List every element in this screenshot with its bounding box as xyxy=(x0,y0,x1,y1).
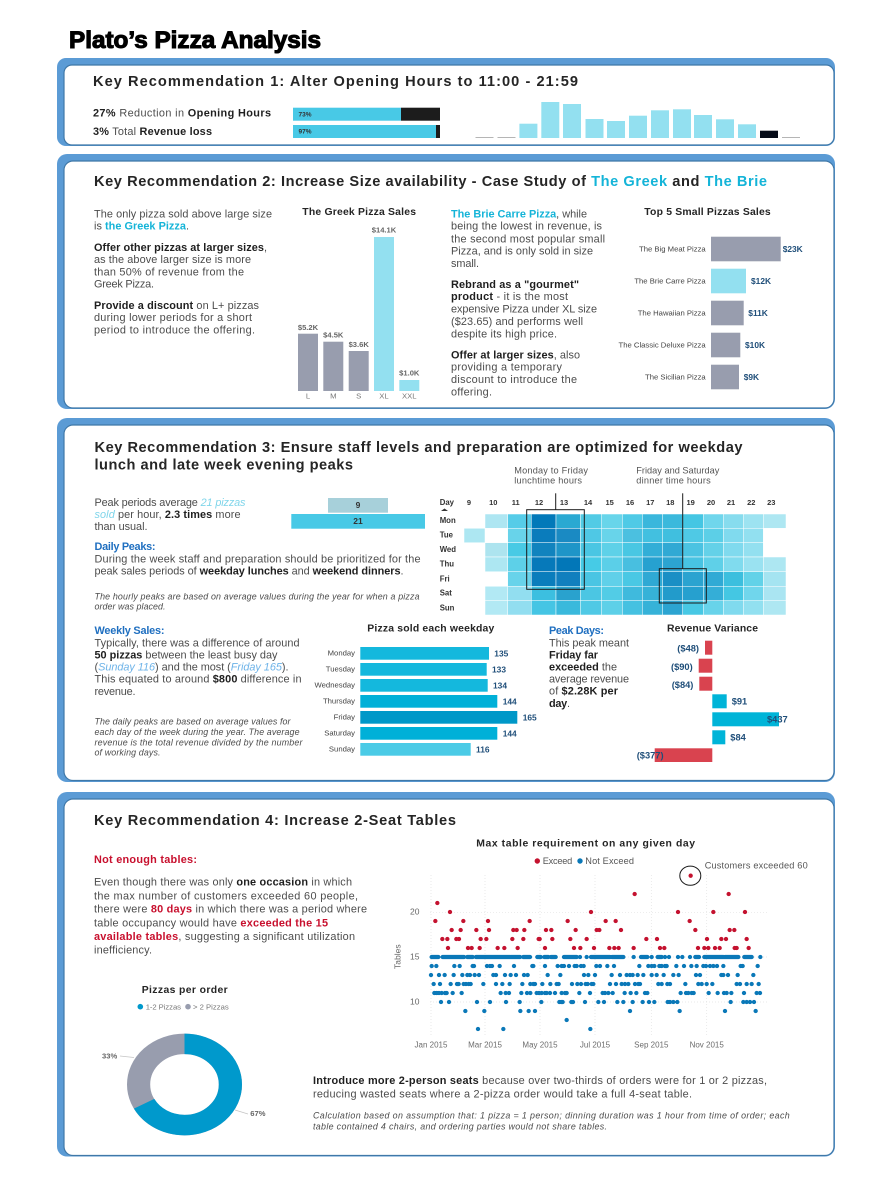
scatter chart: max table requirement: Sep 2015 xyxy=(634,1040,669,1049)
text block: brie carre pizza: being the lowest in revenue, is xyxy=(451,221,603,233)
scatter chart: max table requirement: Jul 2015 xyxy=(580,1040,611,1049)
text block: greek pizza: Provide a discount on L+ pizzas xyxy=(94,300,260,312)
bar chart: peak comparison: 21 xyxy=(353,516,363,526)
bar chart: top 5 small pizzas sales: The Big Meat Pizza xyxy=(639,245,706,254)
bar chart: the greek pizza sales: $5.2K xyxy=(298,323,319,332)
note: daily peaks xyxy=(94,717,304,758)
text block: greek pizza xyxy=(94,209,272,336)
heatmap: orders by day and hour: Tue xyxy=(440,531,454,540)
scatter chart: max table requirement xyxy=(392,839,767,1049)
text block: brie carre pizza: despite its high price. xyxy=(451,329,557,341)
bar chart: revenue variance: ($90) xyxy=(671,662,693,672)
text block: brie carre pizza: providing a temporary xyxy=(451,361,563,373)
text: opening hours reduction: 27% Reduction in Opening Hours xyxy=(93,108,271,120)
progress bar: revenue: 97% xyxy=(298,129,312,136)
bar chart: top 5 small pizzas sales xyxy=(619,207,803,389)
bar chart: revenue variance: $437 xyxy=(767,714,788,724)
bar chart: the greek pizza sales: The Greek Pizza Sales xyxy=(302,207,416,218)
text block: greek pizza: period to introduce the offering. xyxy=(94,324,255,336)
text: introduce more 2-person seats: Introduce more 2-person seats because over two-thirds of orders were for 1 or 2 pizzas, xyxy=(313,1075,767,1087)
text: weekly sales: 50 pizzas between the least busy day xyxy=(94,650,278,662)
heatmap: orders by day and hour: 9 xyxy=(467,498,471,507)
bar chart: top 5 small pizzas sales: $9K xyxy=(744,372,759,382)
bar chart: pizza sold each weekday: 133 xyxy=(492,664,506,674)
title: Plato’s Pizza Analysis xyxy=(69,27,321,54)
heatmap: orders by day and hour: Sat xyxy=(440,589,452,598)
heatmap: orders by day and hour: 16 xyxy=(626,498,634,507)
heatmap: orders by day and hour xyxy=(440,493,786,615)
heatmap: orders by day and hour: 13 xyxy=(560,498,568,507)
text block: greek pizza: Offer other pizzas at larger sizes, xyxy=(94,242,267,254)
donut chart: pizzas per order: 33% xyxy=(102,1051,117,1060)
text: not enough tables xyxy=(94,854,367,956)
heatmap: orders by day and hour: 19 xyxy=(687,498,695,507)
donut chart: pizzas per order: > 2 Pizzas xyxy=(193,1002,229,1012)
text: introduce more 2-person seats: reducing wasted seats where a 2-pizza order would take a full 4-seat table. xyxy=(313,1088,692,1100)
note: calculation assumptions: Calculation based on assumption that: 1 pizza = 1 person; dinning duration was 1 hour from time of order; each xyxy=(313,1111,790,1121)
heatmap: orders by day and hour: 20 xyxy=(707,498,715,507)
bar chart: pizza sold each weekday: 135 xyxy=(494,648,509,658)
text: peak days: of $2.28K per xyxy=(549,686,619,698)
heatmap: orders by day and hour: Mon xyxy=(440,516,456,525)
bar chart: the greek pizza sales: $4.5K xyxy=(323,330,344,339)
text: daily peaks: Daily Peaks: xyxy=(94,541,156,553)
bar chart: the greek pizza sales: XXL xyxy=(402,392,417,400)
note: hourly peaks: order was placed. xyxy=(94,602,166,612)
heading: recommendation 2: Key Recommendation 2: Increase Size availability - Case Study of The Greek and The Brie xyxy=(94,174,767,190)
note: hourly peaks: The hourly peaks are based on average values during the year for when a pizza xyxy=(94,591,420,601)
bar chart: top 5 small pizzas sales: The Hawaiian Pizza xyxy=(638,308,706,317)
text block: brie carre pizza xyxy=(451,209,605,398)
scatter chart: max table requirement: Not Exceed xyxy=(585,856,634,866)
text: peak periods: sold per hour, 2.3 times more xyxy=(94,509,240,521)
text: not enough tables: table occupancy would have exceeded the 15 xyxy=(94,917,328,929)
panel: recommendation 3 xyxy=(57,418,835,782)
heatmap: orders by day and hour: Wed xyxy=(440,545,456,554)
text: daily peaks xyxy=(94,541,420,577)
bar chart: top 5 small pizzas sales: Top 5 Small Pizzas Sales xyxy=(644,207,771,218)
text: revenue loss: 3% Total Revenue loss xyxy=(93,126,212,138)
bar chart: pizza sold each weekday: 165 xyxy=(523,712,537,722)
bar chart: the greek pizza sales: S xyxy=(356,392,361,400)
progress bar: revenue xyxy=(293,125,440,138)
text block: greek pizza: is the Greek Pizza. xyxy=(94,220,189,232)
text block: brie carre pizza: Rebrand as a "gourmet" xyxy=(451,279,579,291)
scatter chart: max table requirement: May 2015 xyxy=(522,1040,558,1049)
donut chart: pizzas per order: Pizzas per order xyxy=(142,985,228,996)
text: peak days: exceeded the xyxy=(549,662,617,674)
note: daily peaks: The daily peaks are based on average values for xyxy=(94,717,292,727)
note: daily peaks: each day of the week during the year. The average xyxy=(94,727,300,737)
bar chart: pizza sold each weekday: Monday xyxy=(328,649,355,658)
bar chart: the greek pizza sales: $14.1K xyxy=(372,226,397,235)
bar chart: top 5 small pizzas sales: The Classic Deluxe Pizza xyxy=(619,340,706,349)
bar chart: the greek pizza sales: M xyxy=(330,392,337,400)
annotation: lunchtime hours: Monday to Friday xyxy=(514,465,588,475)
text: peak days xyxy=(549,625,629,710)
text: not enough tables: Even though there was only one occasion in which xyxy=(94,877,352,889)
scatter chart: max table requirement: 10 xyxy=(410,996,420,1006)
bar chart: revenue variance: $84 xyxy=(730,733,747,743)
callout: customers exceeded 60: Customers exceeded 60 xyxy=(705,861,808,871)
text: not enough tables: the max number of customers exceeded 60 people, xyxy=(94,890,358,902)
text: not enough tables: Not enough tables: xyxy=(94,854,197,866)
bar chart: revenue variance: $91 xyxy=(732,697,747,707)
text: weekly sales: Typically, there was a difference of around xyxy=(94,638,300,650)
bar chart: pizza sold each weekday: 144 xyxy=(503,728,517,738)
text: peak days: Peak Days: xyxy=(549,625,604,637)
text block: greek pizza: as the above larger size is more xyxy=(94,254,251,266)
scatter chart: max table requirement: Exceed xyxy=(543,856,572,866)
bar chart: revenue variance xyxy=(637,624,788,762)
text: peak days: day. xyxy=(549,698,570,710)
note: daily peaks: of working days. xyxy=(94,748,160,758)
text: peak periods: than usual. xyxy=(94,521,148,533)
heatmap: orders by day and hour: 10 xyxy=(489,498,497,507)
heatmap: orders by day and hour: Thu xyxy=(440,560,454,569)
bar chart: top 5 small pizzas sales: The Brie Carre Pizza xyxy=(634,276,706,285)
heatmap: orders by day and hour: Fri xyxy=(440,574,450,583)
bar chart: peak comparison: 9 xyxy=(356,500,361,510)
bar chart: the greek pizza sales: $3.6K xyxy=(349,340,369,349)
text: peak periods xyxy=(94,497,246,533)
text: weekly sales: This equated to around $800 difference in xyxy=(94,674,302,686)
highlight box: dinner time xyxy=(659,493,706,603)
bar chart: top 5 small pizzas sales: $23K xyxy=(783,244,803,254)
text block: greek pizza: during lower periods for a short xyxy=(94,312,252,324)
text: daily peaks: peak sales periods of weekday lunches and weekend dinners. xyxy=(94,565,404,577)
annotation: dinner time hours xyxy=(636,465,720,485)
annotation: lunchtime hours xyxy=(514,465,588,485)
heatmap: orders by day and hour: Day xyxy=(440,498,455,507)
bar chart: peak comparison xyxy=(291,498,425,529)
heatmap: orders by day and hour: 12 xyxy=(535,498,543,507)
text block: brie carre pizza: discount to introduce the xyxy=(451,374,577,386)
bar chart: the greek pizza sales: L xyxy=(306,392,311,400)
text: peak days: Friday far xyxy=(549,650,599,662)
bar chart: pizza sold each weekday: Tuesday xyxy=(326,665,355,674)
bar chart: pizza sold each weekday: 134 xyxy=(493,680,507,690)
text block: brie carre pizza: The Brie Carre Pizza, while xyxy=(451,209,587,221)
text block: brie carre pizza: ($23.65) and performs well xyxy=(451,316,583,328)
bar chart: the greek pizza sales xyxy=(298,207,420,400)
heading: recommendation 3: lunch and late week evening peaks xyxy=(94,458,353,474)
text: weekly sales xyxy=(94,625,302,698)
text: peak days: average revenue xyxy=(549,674,629,686)
annotation: lunchtime hours: lunchtime hours xyxy=(514,475,582,485)
heatmap: orders by day and hour: 21 xyxy=(727,498,735,507)
text: daily peaks: During the week staff and preparation should be prioritized for the xyxy=(94,553,420,565)
bar chart: pizza sold each weekday: Pizza sold each weekday xyxy=(367,624,495,635)
bar chart: revenue variance: ($84) xyxy=(672,680,693,690)
text block: brie carre pizza: Offer at larger sizes, also xyxy=(451,349,580,361)
heatmap: orders by day and hour: 22 xyxy=(747,498,755,507)
text: weekly sales: revenue. xyxy=(94,686,136,698)
text: peak days: This peak meant xyxy=(549,638,629,650)
bar chart: pizza sold each weekday: Thursday xyxy=(323,697,355,706)
heading: recommendation 3: Key Recommendation 3: Ensure staff levels and preparation are optimized for weekday xyxy=(94,440,743,456)
bar chart: pizza sold each weekday: 116 xyxy=(476,744,490,754)
bar chart: revenue variance: ($377) xyxy=(637,751,664,761)
panel: recommendation 1 xyxy=(57,58,835,146)
text: peak periods: Peak periods average 21 pizzas xyxy=(94,497,246,509)
text block: greek pizza: than 50% of revenue from the xyxy=(94,266,244,278)
heading: recommendation 3 xyxy=(94,440,743,474)
heatmap: orders by day and hour: 14 xyxy=(584,498,593,507)
bar chart: the greek pizza sales: $1.0K xyxy=(399,369,420,378)
text: not enough tables: available tables, suggesting a significant utilization xyxy=(94,931,355,943)
scatter chart: max table requirement: Tables xyxy=(392,944,402,969)
text block: brie carre pizza: small. xyxy=(451,258,479,270)
bar chart: pizza sold each weekday: Wednesday xyxy=(315,681,355,690)
scatter chart: max table requirement: Jan 2015 xyxy=(415,1040,448,1049)
bar chart: pizza sold each weekday: Saturday xyxy=(324,729,355,738)
text block: greek pizza: The only pizza sold above large size xyxy=(94,209,272,221)
text block: brie carre pizza: product - it is the most xyxy=(451,291,568,303)
bar chart: hourly orders xyxy=(476,102,800,138)
bar chart: revenue variance: Revenue Variance xyxy=(667,624,758,635)
bar chart: top 5 small pizzas sales: $12K xyxy=(751,276,771,286)
heatmap: orders by day and hour: Sun xyxy=(440,603,455,612)
text block: brie carre pizza: offering. xyxy=(451,386,492,398)
bar chart: pizza sold each weekday: Sunday xyxy=(329,745,355,754)
bar chart: top 5 small pizzas sales: $11K xyxy=(748,308,768,318)
annotation: dinner time hours: Friday and Saturday xyxy=(636,465,720,475)
text: not enough tables: inefficiency. xyxy=(94,944,152,956)
bar chart: top 5 small pizzas sales: The Sicilian Pizza xyxy=(645,372,706,381)
note: calculation assumptions xyxy=(313,1111,790,1131)
text block: brie carre pizza: expensive Pizza under XL size xyxy=(451,304,597,316)
panel: recommendation 2 xyxy=(57,154,835,409)
text: introduce more 2-person seats xyxy=(313,1075,767,1100)
heading: recommendation 4: Key Recommendation 4: Increase 2-Seat Tables xyxy=(94,813,456,829)
text block: brie carre pizza: Pizza, and is only sold in size xyxy=(451,246,593,258)
bar chart: pizza sold each weekday: Friday xyxy=(334,713,355,722)
donut chart: pizzas per order: 67% xyxy=(250,1109,266,1118)
annotation: dinner time hours: dinner time hours xyxy=(636,475,711,485)
scatter chart: max table requirement: 20 xyxy=(410,907,420,917)
text block: greek pizza: Greek Pizza. xyxy=(94,279,154,291)
note: hourly peaks xyxy=(94,591,420,612)
panel: recommendation 4 xyxy=(57,792,835,1156)
heatmap: orders by day and hour: 23 xyxy=(767,498,775,507)
bar chart: revenue variance: ($48) xyxy=(677,644,699,654)
highlight box: lunchtime xyxy=(527,493,584,589)
heatmap: orders by day and hour: 18 xyxy=(666,498,674,507)
donut chart: pizzas per order xyxy=(102,985,266,1125)
donut chart: pizzas per order: 1-2 Pizzas xyxy=(146,1002,181,1012)
heatmap: orders by day and hour: 11 xyxy=(512,498,520,507)
scatter chart: max table requirement: Mar 2015 xyxy=(468,1040,502,1049)
text: weekly sales: Weekly Sales: xyxy=(94,625,164,637)
scatter chart: max table requirement: 15 xyxy=(410,951,420,961)
scatter chart: max table requirement: Max table requirement on any given day xyxy=(476,839,695,850)
bar chart: the greek pizza sales: XL xyxy=(379,392,389,400)
heatmap: orders by day and hour: 15 xyxy=(606,498,614,507)
scatter chart: max table requirement: Nov 2015 xyxy=(690,1040,724,1049)
bar chart: pizza sold each weekday: 144 xyxy=(503,696,517,706)
note: calculation assumptions: table contained 4 chairs, and ordering parties would not share tables. xyxy=(313,1121,607,1131)
text: not enough tables: there were 80 days in which there was a period where xyxy=(94,904,367,916)
note: daily peaks: revenue is the total revenue divided by the number xyxy=(94,737,304,747)
bar chart: top 5 small pizzas sales: $10K xyxy=(745,340,765,350)
heading: recommendation 1: Key Recommendation 1: Alter Opening Hours to 11:00 - 21:59 xyxy=(93,74,578,90)
heatmap: orders by day and hour: 17 xyxy=(646,498,654,507)
progress bar: opening hours: 73% xyxy=(298,112,312,118)
progress bar: opening hours xyxy=(293,108,440,121)
text block: brie carre pizza: the second most popular small xyxy=(451,233,605,245)
bar chart: pizza sold each weekday xyxy=(315,624,537,756)
text: weekly sales: (Sunday 116) and the most (Friday 165). xyxy=(94,662,288,674)
callout: customers exceeded 60 xyxy=(680,861,808,885)
